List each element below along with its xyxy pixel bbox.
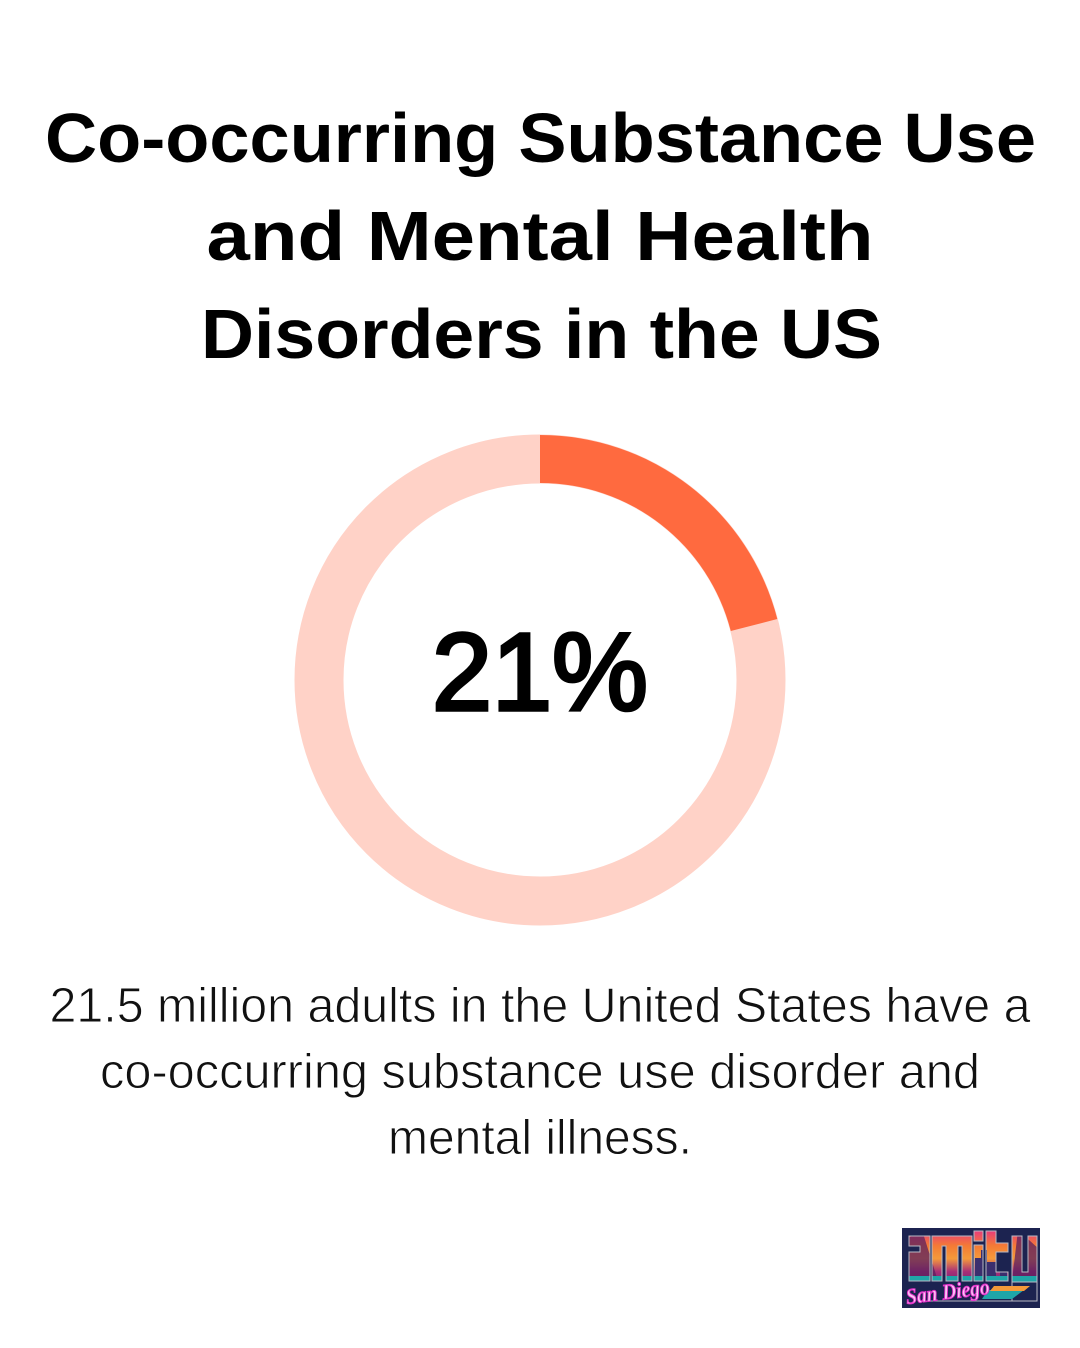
donut track xyxy=(319,459,761,901)
title xyxy=(45,99,1036,373)
icon: Amity San Diego logo xyxy=(902,1228,1040,1309)
title: Co-occurring Substance Use xyxy=(45,99,1036,177)
description text: co-occurring substance use disorder and xyxy=(100,1045,980,1099)
logo script text: San Diego xyxy=(904,1274,991,1309)
description text: 21.5 million adults in the United States have a xyxy=(50,979,1031,1033)
donut highlighted segment xyxy=(540,435,777,631)
description text xyxy=(50,979,1031,1165)
description text: mental illness. xyxy=(388,1111,692,1165)
donut chart: 21% xyxy=(319,435,777,901)
donut value: 21% xyxy=(432,611,648,734)
title: Disorders in the US xyxy=(201,295,882,373)
title: and Mental Health xyxy=(206,197,874,275)
